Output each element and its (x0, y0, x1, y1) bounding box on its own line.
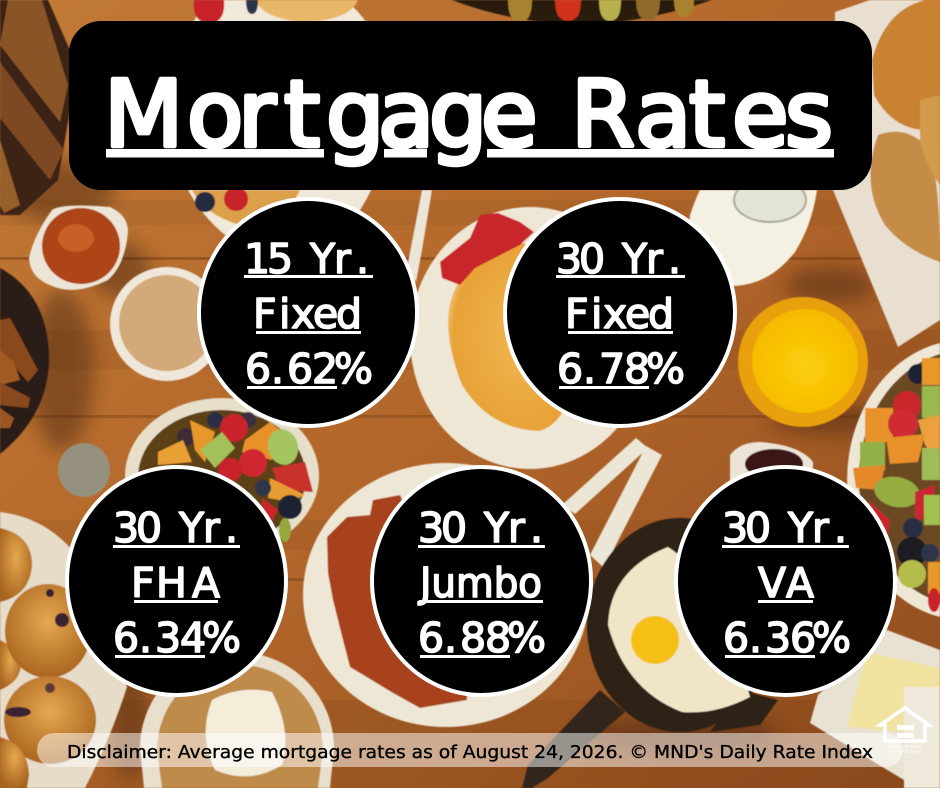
title banner (69, 21, 872, 190)
rate circle: 30 Yr. Jumbo 6.88%: 30 Yr. (418, 504, 543, 552)
food: centre-left fruit bowl (125, 398, 319, 554)
food: bread board top left (0, 0, 72, 215)
rate circle: 30 Yr. VA 6.36% (676, 467, 895, 695)
title: Mortgage Rates (104, 61, 834, 168)
rate circle: 30 Yr. VA 6.36%: VA (758, 559, 814, 607)
food: muffins (0, 512, 127, 788)
disclaimer bar (37, 733, 903, 767)
rate circle: 30 Yr. Jumbo 6.88%: 6.88% (418, 614, 546, 662)
rate circle: 15 Yr. Fixed 6.62%: 6.62% (245, 345, 373, 393)
disclaimer bar: Disclaimer: Average mortgage rates as of August 24, 2026. © MND's Daily Rate Index (67, 742, 873, 763)
food: top fruit skillet (452, 0, 712, 24)
food: bacon plate (303, 463, 589, 727)
rate circle: 30 Yr. VA 6.36%: 6.36% (723, 614, 851, 662)
food: sausage pan (0, 268, 49, 454)
food: orange juice glass (738, 297, 868, 427)
rate circle: 30 Yr. Jumbo 6.88%: Jumbo (417, 559, 542, 607)
food: small jam dish (730, 442, 813, 490)
food: right fruit bowl (847, 343, 940, 617)
rate circle: 30 Yr. FHA 6.34%: 6.34% (113, 614, 241, 662)
rate circle: 30 Yr. FHA 6.34%: 30 Yr. (113, 504, 238, 552)
food: coffee cup (110, 267, 224, 381)
food: jam dish (29, 206, 128, 290)
food: forks (562, 438, 662, 568)
icon: equal housing opportunity: EQUAL HOUSING (887, 744, 923, 749)
title: Mortgage Rates: Mortgage (104, 61, 538, 168)
icon: equal housing opportunity: OPPORTUNITY (889, 749, 921, 754)
title: Mortgage Rates: Rates (571, 61, 833, 168)
food: butter dish (810, 630, 940, 788)
food: top plate with pancakes and berries (168, 0, 392, 235)
food: granola bowl (140, 652, 334, 788)
food: napkin, croissant and bagels (833, 0, 940, 347)
rate circle: 30 Yr. VA 6.36%: 30 Yr. (722, 504, 847, 552)
food: spoon (58, 443, 110, 497)
food: milk jug (690, 178, 817, 286)
rate circle: 30 Yr. Fixed 6.78%: 30 Yr. (556, 235, 681, 283)
food: skillet with egg (522, 518, 778, 788)
table shadows under dishes (5, 160, 890, 780)
rate circle: 30 Yr. FHA 6.34% (67, 467, 286, 695)
rate circle: 30 Yr. FHA 6.34%: FHA (131, 559, 220, 607)
rate circle: 15 Yr. Fixed 6.62% (199, 199, 417, 426)
food: knife handle (407, 190, 432, 282)
rate circle: 15 Yr. Fixed 6.62%: 15 Yr. (244, 235, 369, 283)
rate circle: 15 Yr. Fixed 6.62%: Fixed (253, 290, 362, 338)
icon: equal housing opportunity (880, 708, 929, 754)
rate circle: 30 Yr. Fixed 6.78%: 6.78% (557, 345, 685, 393)
food: pancake plate (410, 207, 650, 469)
rate circle: 30 Yr. Jumbo 6.88% (372, 467, 591, 695)
rate circle: 30 Yr. Fixed 6.78% (505, 199, 735, 426)
rate circle: 30 Yr. Fixed 6.78%: Fixed (565, 290, 674, 338)
